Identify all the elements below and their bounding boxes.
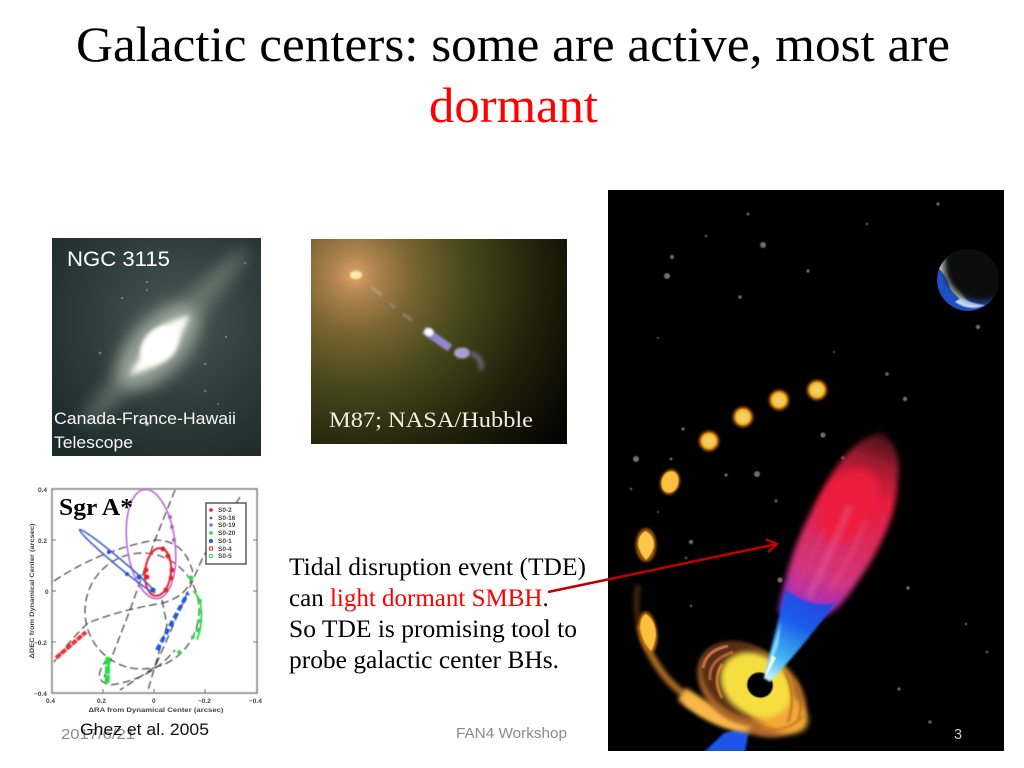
footer: workshop name: FAN4 Workshop: [456, 726, 567, 742]
axis tick labels: [34, 487, 262, 705]
debris stream: [637, 585, 752, 726]
axis tick labels: −0.4: [34, 691, 47, 698]
S0-1 track: [157, 593, 188, 650]
panel: M87 photo: [311, 239, 567, 444]
black hole: [746, 672, 774, 698]
axis tick labels: 0: [152, 698, 156, 705]
label: NGC 3115: NGC 3115: [67, 248, 170, 271]
title: dormant: [429, 77, 598, 133]
panel: tidal disruption illustration: [608, 190, 1020, 757]
title: Galactic centers: some are active, most are: [76, 16, 950, 72]
text block: TDE explanation: [289, 554, 586, 674]
dashed orbits: [54, 490, 240, 690]
legend: S0-2: [218, 507, 232, 514]
legend: S0-19: [218, 522, 236, 529]
stream overlap on disk: [684, 693, 752, 732]
legend: [206, 503, 246, 564]
legend: S0-16: [218, 515, 236, 522]
S0-19 orbit: [124, 489, 178, 600]
background stars: [630, 202, 988, 724]
accretion disk: [694, 638, 812, 741]
axis tick labels: 0.2: [38, 538, 47, 545]
label: Canada-France-Hawaii Telescope: Telescope: [54, 433, 133, 452]
legend: S0-1: [218, 538, 232, 545]
S0-16 orbit: [77, 527, 157, 595]
x axis title: ΔRA from Dynamical Center (arcsec): [88, 707, 224, 714]
S0-4 track: [56, 632, 86, 658]
axis tick labels: 0: [45, 589, 49, 596]
label: Sgr A*: Sgr A*: [59, 495, 133, 521]
page number: 3: [954, 727, 962, 743]
legend: S0-5: [218, 553, 232, 560]
chart: stellar orbits around Sgr A*: [30, 486, 262, 714]
icon: star being disrupted (sequence): [636, 380, 828, 654]
axis tick labels: 0.4: [46, 698, 55, 705]
S0-20 track: [193, 591, 201, 640]
S0-2 orbit: [143, 547, 173, 597]
icon: Earth: [937, 249, 999, 311]
S0-5 track: [107, 657, 108, 684]
axis tick labels: −0.2: [198, 698, 211, 705]
axis tick labels: −0.4: [249, 698, 262, 705]
arrow: TDE text to plume: [548, 540, 777, 592]
footer: date: 2017/6/21: [61, 727, 135, 743]
caption: Ghez et al. 2005: Ghez et al. 2005: [80, 720, 209, 739]
text block: TDE explanation: can light dormant SMBH.: [289, 585, 549, 612]
label: Canada-France-Hawaii Telescope: Canada-France-Hawaii: [54, 409, 236, 428]
legend: S0-20: [218, 530, 236, 537]
label: Canada-France-Hawaii Telescope: [54, 409, 236, 452]
label: M87; NASA/Hubble: M87; NASA/Hubble: [329, 407, 533, 432]
red plume: [778, 432, 899, 622]
legend: S0-4: [218, 546, 232, 553]
text block: TDE explanation: Tidal disruption event (TDE): [289, 554, 586, 581]
axis tick labels: 0.4: [38, 487, 47, 494]
y axis title: ΔDEC from Dynamical Center (arcsec): [30, 524, 36, 658]
blue jet: [764, 590, 836, 682]
title: [76, 16, 950, 133]
axis tick labels: 0.2: [97, 698, 106, 705]
axis tick labels: −0.2: [34, 640, 47, 647]
panel: NGC 3115 photo: [52, 238, 261, 456]
text block: TDE explanation: probe galactic center BHs.: [289, 647, 559, 674]
lower jet: [703, 729, 750, 751]
text block: TDE explanation: So TDE is promising tool to: [289, 616, 577, 643]
